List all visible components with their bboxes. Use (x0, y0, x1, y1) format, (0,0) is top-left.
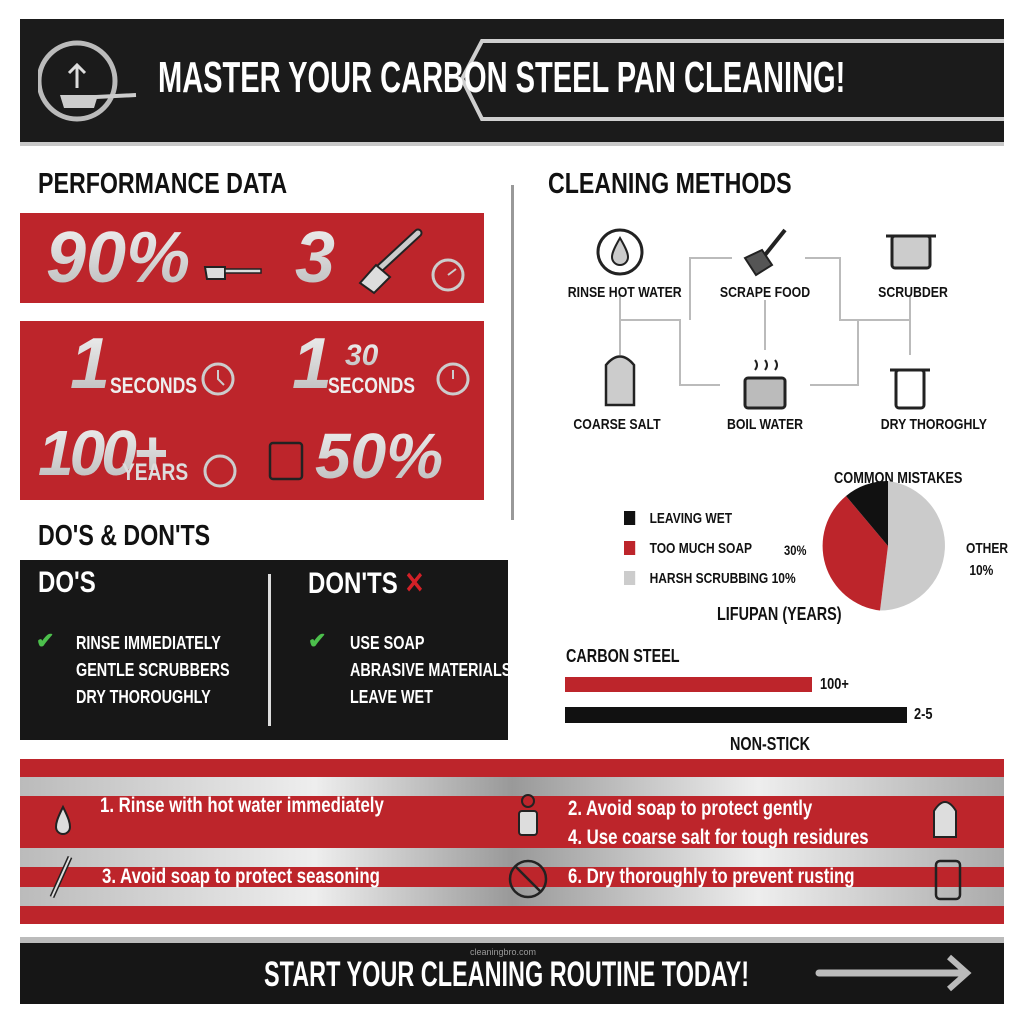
icon: towel frame (934, 860, 962, 900)
pie chart: common mistakes (624, 470, 1008, 624)
bar chart: lifespan: 2-5 (914, 706, 932, 723)
panel: performance stats row 2: SECONDS (328, 373, 415, 398)
icon: no symbol (508, 860, 548, 898)
panel: performance stats row 2: 30 (345, 339, 378, 372)
panel: do's and don'ts: DO'S (38, 566, 96, 599)
panel: tips band (20, 759, 1004, 924)
panel: performance stats row 2: 1 (70, 324, 110, 404)
panel: performance stats row 2: 50% (315, 420, 443, 492)
label: scrape food: SCRAPE FOOD (720, 284, 810, 301)
panel: do's and don'ts: RINSE IMMEDIATELY (76, 633, 221, 653)
bar chart: lifespan: NON-STICK (730, 734, 810, 754)
footer: call to action (20, 937, 1004, 1004)
pie chart: common mistakes: LIFUPAN (YEARS) (717, 604, 842, 624)
panel: do's and don'ts: DRY THOROUGHLY (76, 687, 211, 707)
title: MASTER YOUR CARBON STEEL PAN CLEANING! (158, 53, 845, 102)
icon: drops (55, 804, 71, 835)
label: coarse salt: COARSE SALT (573, 416, 661, 433)
panel: tips band: 1. Rinse with hot water immediately (100, 794, 384, 817)
icon: pan with arrow (38, 40, 136, 122)
panel: tips band: 6. Dry thoroughly to prevent rusting (568, 865, 855, 888)
header banner (20, 19, 1004, 146)
bar chart: lifespan: CARBON STEEL (566, 646, 680, 666)
icon: brush (358, 228, 422, 294)
heading: cleaning methods: CLEANING METHODS (548, 168, 792, 200)
panel: performance stats row 2: SECONDS (110, 373, 197, 398)
panel: performance stats row 2: 100+ (38, 417, 166, 489)
panel: tips band: 4. Use coarse salt for tough residures (568, 826, 869, 849)
panel: do's and don'ts: LEAVE WET (350, 687, 433, 707)
label: boil water: BOIL WATER (727, 416, 803, 433)
icon: pan (204, 266, 262, 280)
label: dry thoroughly: DRY THOROGHLY (881, 416, 987, 433)
panel: do's and don'ts: ✔ (36, 628, 54, 653)
panel: do's and don'ts: ✔ (308, 628, 326, 653)
panel: tips band: 2. Avoid soap to protect gently (568, 797, 812, 820)
heading: performance data: PERFORMANCE DATA (38, 168, 287, 200)
icon: boiling pot (745, 360, 785, 408)
bar chart: lifespan (565, 646, 932, 754)
panel: do's and don'ts: GENTLE SCRUBBERS (76, 660, 230, 680)
footer: call to action: cleaningbro.com (470, 947, 536, 957)
icon: salt shaker (933, 801, 957, 838)
legend: LEAVING WET (650, 510, 732, 527)
icon: spatula (745, 230, 785, 275)
panel: do's and don'ts: ABRASIVE MATERIALS (350, 660, 511, 680)
icon: gauge (432, 258, 464, 292)
icon: salt shaker (606, 356, 634, 405)
legend: HARSH SCRUBBING 10% (650, 570, 796, 587)
panel: performance stats row 1 (20, 213, 484, 303)
panel: performance stats row 2: YEARS (122, 459, 188, 486)
pie chart: common mistakes: 10% (969, 562, 993, 579)
panel: performance stats row 1: 90% (46, 218, 190, 298)
divider vertical (511, 185, 514, 520)
label: scrubber: SCRUBDER (878, 284, 948, 301)
panel: performance stats row 2 (20, 321, 484, 500)
arrow (816, 954, 972, 992)
bar chart: lifespan: 100+ (820, 676, 849, 693)
legend: TOO MUCH SOAP (650, 540, 752, 557)
panel: do's and don'ts: USE SOAP (350, 633, 424, 653)
panel: performance stats row 1: 3 (295, 218, 335, 298)
heading: do's and don'ts: DO'S & DON'TS (38, 520, 210, 552)
icon: pot (886, 236, 936, 268)
panel: do's and don'ts: DON'TS ✕ (308, 567, 424, 600)
panel: performance stats row 2: 1 (292, 324, 332, 404)
pie chart: common mistakes: OTHER (966, 540, 1008, 557)
panel: do's and don'ts (20, 560, 508, 740)
icon: scrubber tool (518, 794, 538, 836)
pie chart: common mistakes: COMMON MISTAKES (834, 470, 962, 487)
legend (624, 510, 796, 587)
header chevron frame (460, 39, 1004, 121)
icon: towel (890, 370, 930, 408)
flowchart: cleaning methods (596, 228, 936, 410)
icon: water drop (598, 230, 642, 274)
footer: call to action: START YOUR CLEANING ROUTINE TODAY! (264, 955, 749, 994)
label: rinse hot water: RINSE HOT WATER (568, 284, 682, 301)
pie chart: common mistakes: 30% (784, 542, 806, 558)
panel: tips band: 3. Avoid soap to protect seasoning (102, 865, 380, 888)
icon: brush (50, 856, 72, 898)
